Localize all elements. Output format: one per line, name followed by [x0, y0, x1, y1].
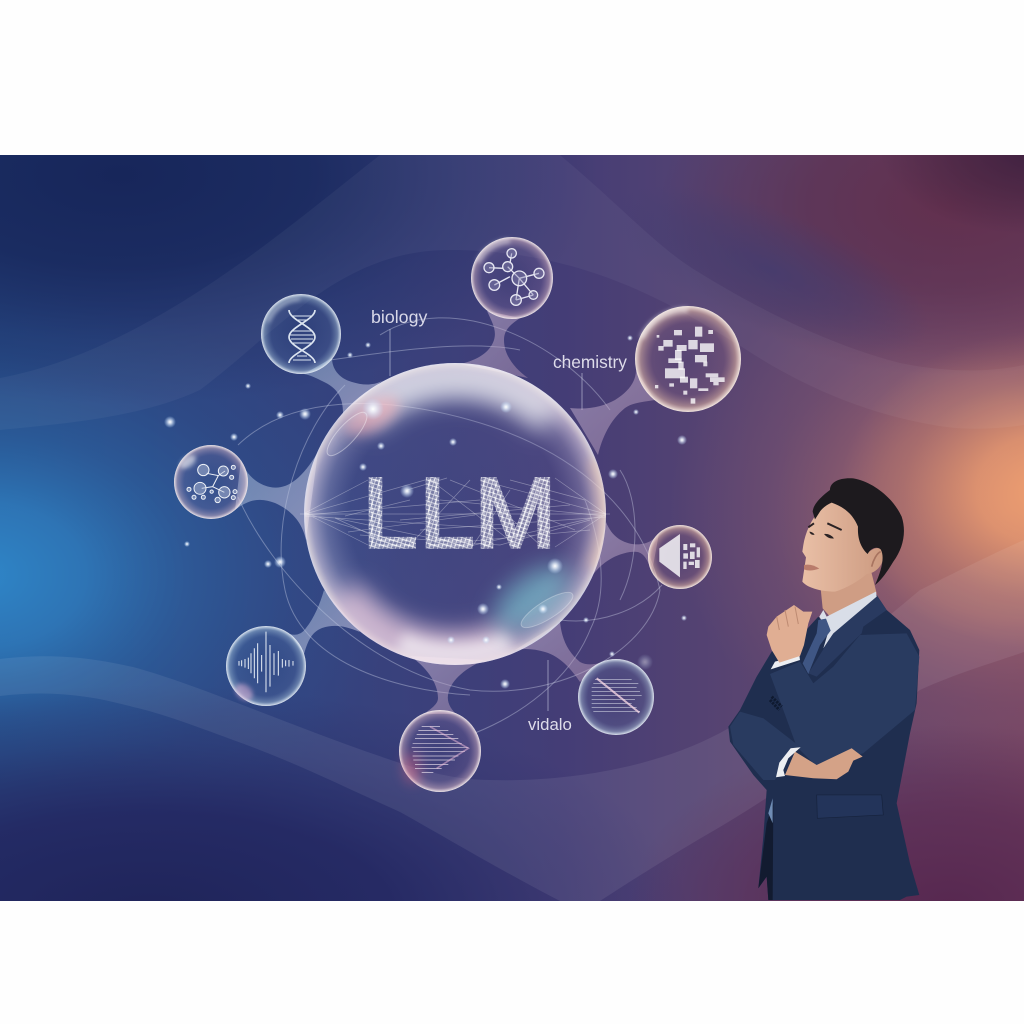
lower hand [785, 748, 863, 779]
upper wave band [0, 155, 1024, 430]
ambient sparkles [164, 335, 687, 689]
fist [767, 605, 812, 663]
infographic canvas [0, 155, 1024, 901]
icon: speaker grid [659, 534, 700, 577]
hair [813, 478, 904, 585]
bubble highlight [268, 299, 300, 322]
teal glow [484, 554, 580, 642]
icon: pixel cluster [655, 327, 725, 404]
bubble: right signal [578, 659, 654, 735]
central LLM bubble [300, 363, 610, 665]
far sleeve [770, 633, 919, 767]
bubble: bottom signal [399, 710, 481, 792]
brow [808, 523, 842, 530]
lips [804, 565, 819, 571]
bubble connectors [235, 311, 659, 714]
ear shadow [872, 552, 881, 567]
icon: clustered molecules [187, 464, 237, 503]
front opening [758, 803, 773, 900]
icon: DNA helix [289, 310, 315, 363]
label: biology: biology [371, 307, 427, 327]
suit body [728, 595, 919, 900]
left lapel and chest [808, 595, 887, 677]
sleeve buttons [770, 697, 782, 710]
orbit lines and nodes [238, 318, 662, 733]
bubble: waveform [226, 626, 306, 706]
person in suit [728, 478, 919, 900]
icon: molecule network [484, 249, 544, 305]
sparkle nodes [359, 398, 563, 644]
network lines through LLM [300, 478, 610, 548]
bubble body [304, 363, 606, 665]
icon: streak lines [592, 678, 642, 713]
bottom white glow [400, 642, 510, 653]
pocket flap [817, 795, 883, 818]
pink tint [232, 680, 256, 704]
pink top left glow [342, 394, 402, 442]
bubble: left molecule [174, 445, 248, 519]
shirt glimpse [768, 798, 773, 823]
red tint [403, 752, 421, 784]
tie [803, 619, 831, 674]
icon: arrow lines [412, 727, 468, 773]
right warm rim [592, 460, 602, 568]
bubble highlight [642, 310, 688, 338]
eyes [809, 532, 834, 538]
icon: audio waveform [239, 632, 293, 692]
label: vidalo: vidalo [528, 715, 572, 734]
bubble: speaker [648, 525, 712, 589]
title: LLM: LLM [363, 458, 556, 568]
lower arm [730, 712, 800, 780]
bubble highlight [178, 453, 198, 471]
neck [820, 567, 877, 617]
face [802, 502, 884, 592]
bottom pink glow [345, 592, 510, 648]
label connector lines [390, 329, 582, 711]
lower wave band [0, 540, 1024, 901]
bubble: DNA biology [261, 294, 341, 374]
bubble: top molecule [471, 237, 553, 319]
bubble glows clipped to sphere [339, 381, 602, 653]
label: chemistry: chemistry [553, 352, 627, 372]
lens reflections [322, 407, 372, 461]
shirt collar [819, 592, 877, 648]
bubble: chemistry pixel cluster [635, 306, 741, 412]
lower cuff [776, 747, 801, 777]
upper cuff [771, 655, 800, 669]
gradient background panel with waves [0, 155, 1024, 901]
top highlight [362, 381, 550, 420]
bubble highlight [478, 241, 510, 262]
finger creases [777, 607, 798, 630]
